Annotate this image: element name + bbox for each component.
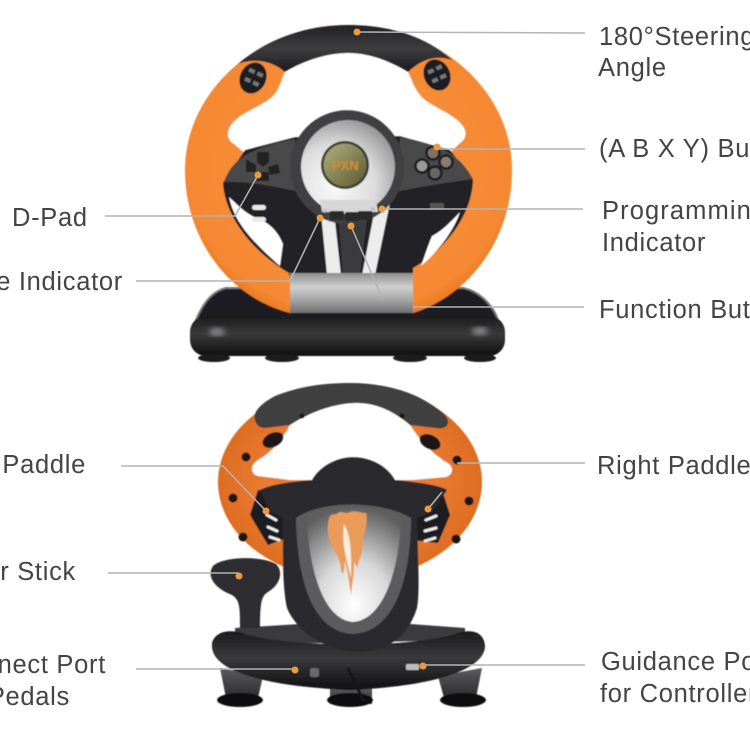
indicator lights <box>323 207 375 213</box>
gear stick <box>211 558 280 628</box>
silver lower panel <box>320 200 378 212</box>
base ring <box>212 631 485 690</box>
pedestal body <box>260 457 447 652</box>
black top grip <box>238 25 452 72</box>
rear view steering wheel <box>211 383 486 707</box>
spoke backplate <box>223 136 473 276</box>
abxy buttons <box>416 146 452 180</box>
suction feet <box>217 693 486 707</box>
screw holes <box>228 414 474 544</box>
center hub <box>290 110 404 224</box>
right paddle <box>412 490 450 543</box>
connect port <box>310 668 319 677</box>
d-pad <box>246 152 280 181</box>
usb cable <box>348 668 364 702</box>
logo disc <box>321 141 369 189</box>
silver hub ring <box>301 120 395 214</box>
white centre opening <box>228 53 466 200</box>
white gaps beside spokes <box>229 197 283 266</box>
shoulder buttons left <box>234 58 272 98</box>
guidance port <box>406 664 419 670</box>
flame logo <box>328 511 367 595</box>
label: d-pad: D-Pad <box>12 204 88 232</box>
label: 180 steering angle: Angle <box>598 54 667 82</box>
suction legs <box>220 668 482 704</box>
rear white opening <box>252 403 452 480</box>
silver u-face <box>307 506 401 622</box>
suction feet <box>198 354 496 362</box>
left control pod <box>224 139 300 192</box>
orange wheel rim <box>185 25 512 313</box>
centre spoke gray panel <box>338 212 368 275</box>
label: right paddle: Right Paddle <box>597 452 750 480</box>
silver u-face surround <box>296 504 411 634</box>
base tray <box>196 288 498 320</box>
function buttons <box>330 211 372 221</box>
black rear grip <box>254 383 448 428</box>
callout dots <box>236 28 440 674</box>
base inner tray <box>235 624 465 645</box>
paddle slits <box>267 515 436 541</box>
vent slots <box>252 203 444 222</box>
callout lines <box>105 32 585 669</box>
orange rear rim <box>218 384 482 580</box>
left paddle <box>250 490 295 545</box>
label: programming indicator: Indicator <box>602 229 706 257</box>
silver spokes <box>320 203 390 275</box>
flame highlight <box>343 524 351 578</box>
front view steering wheel <box>185 25 512 362</box>
silver center bar <box>290 273 413 313</box>
right control pod <box>395 137 473 192</box>
logo text: PXN <box>332 158 359 173</box>
base highlights <box>209 327 488 336</box>
base front <box>190 316 505 356</box>
shoulder buttons right <box>418 55 456 95</box>
